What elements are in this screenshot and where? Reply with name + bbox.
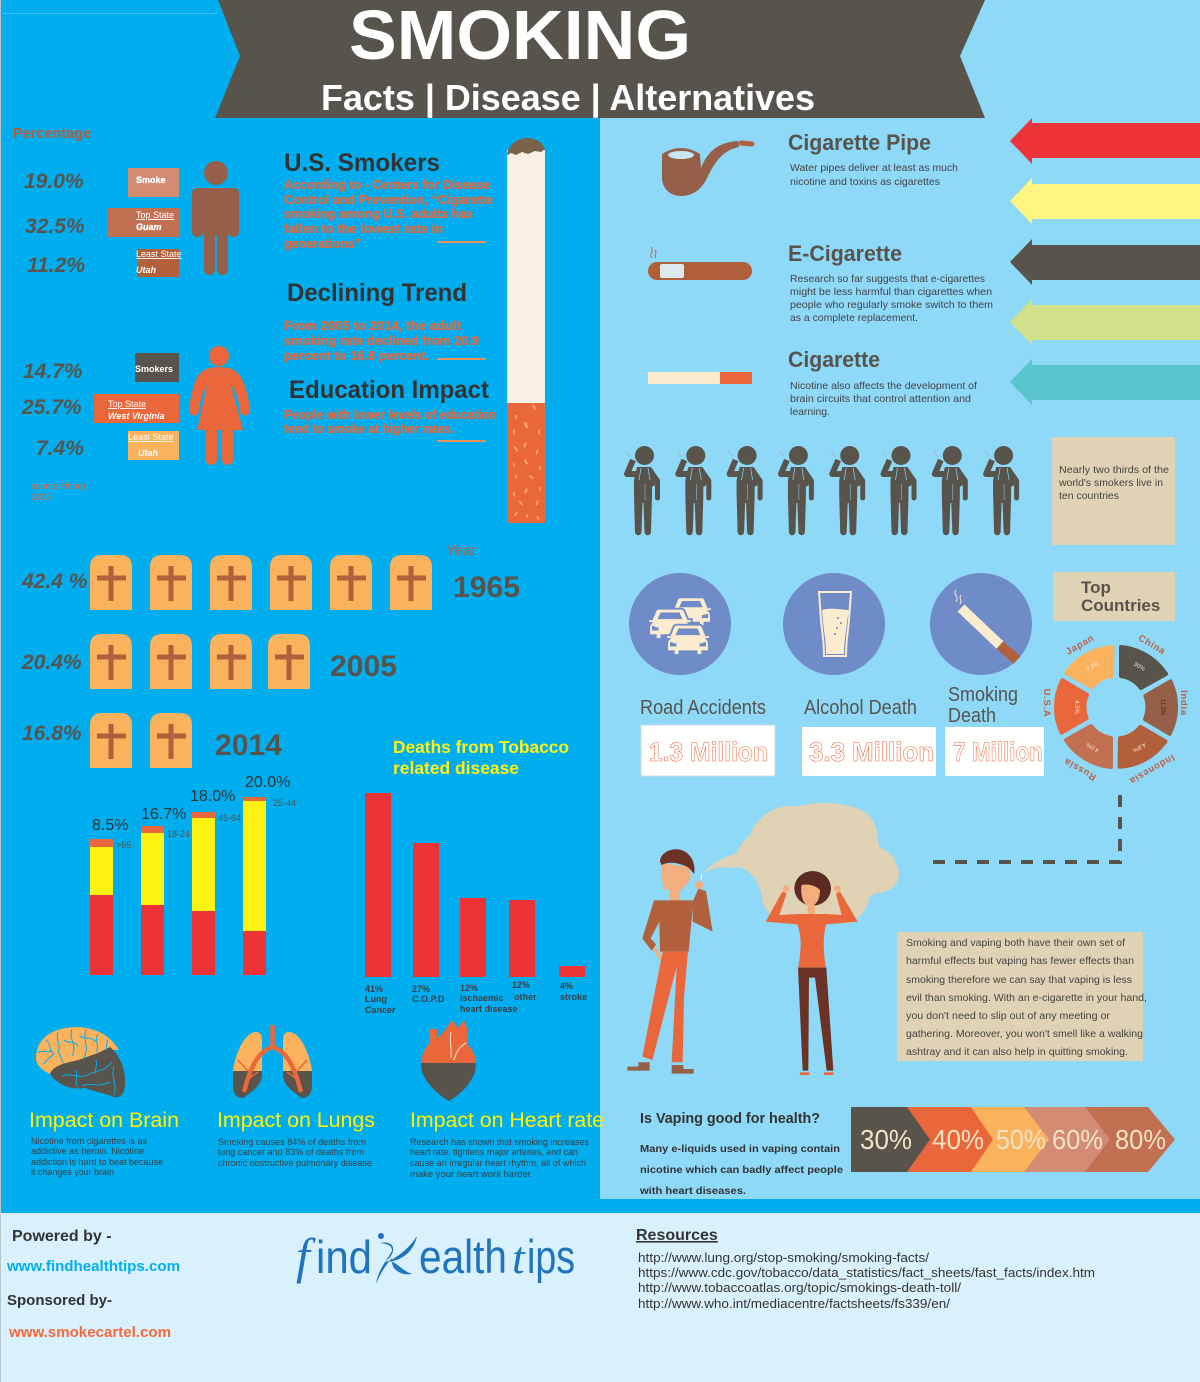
- chart title: related disease: [393, 758, 519, 778]
- value box: 7 Million: [953, 737, 1043, 767]
- text: heart: [410, 1137, 589, 1179]
- text: brain: Nicotine from cigarettes is as: [31, 1136, 147, 1146]
- icon: glass: [783, 573, 885, 675]
- panel: gender percentages: [13, 126, 250, 502]
- callout: smoking vs vaping: evil than smoking. With an e-cigarette in your hand,: [906, 992, 1147, 1004]
- stacked bar chart: age groups: >65: [116, 840, 131, 850]
- bar chart: deaths from tobacco: Ischaemic: [460, 993, 504, 1003]
- donut chart: top countries: 2.8%: [1086, 661, 1101, 673]
- text: lungs: chronic obstructive pulmonary disease: [218, 1158, 372, 1168]
- label: Smoking: [948, 684, 1018, 706]
- text: brain: it changes your brain: [31, 1167, 114, 1177]
- text block: CDC quote: smoking among U.S. adults has: [284, 207, 473, 221]
- panel: smoking death: [930, 573, 1044, 776]
- panel: alternatives: [648, 130, 993, 418]
- donut chart: top countries: 11.2%: [1159, 699, 1165, 716]
- chevron percentages: 80%: [1115, 1124, 1166, 1155]
- icon row: smokers: [626, 446, 1019, 535]
- row 2014: [22, 713, 282, 768]
- value box: 3.3 Million: [809, 737, 934, 767]
- text block: CDC quote: According to - Centers for Disease: [284, 178, 490, 192]
- heading: top countries: Top: [1081, 578, 1111, 597]
- male stats: Smoke: [136, 175, 166, 185]
- value box: [802, 727, 936, 776]
- male stats: [24, 168, 182, 277]
- text: heart: Research has shown that smoking increases: [410, 1137, 589, 1147]
- text: brain: [31, 1136, 163, 1177]
- heading: Is Vaping good for health?: [640, 1110, 820, 1127]
- chevron percentages: 40%: [932, 1124, 984, 1155]
- bar chart: deaths from tobacco: 12%: [512, 980, 530, 990]
- stacked bar chart: age groups: 8.5%: [92, 817, 128, 834]
- text block: CDC quote: fallen to the lowest rate in: [284, 222, 443, 236]
- logo: find health tips: f: [296, 1228, 316, 1284]
- text: e-cigarette: people who regularly smoke switch to them: [790, 299, 993, 311]
- icon: tall cigarette: [507, 138, 545, 523]
- chart title: [393, 737, 569, 778]
- stacked bar chart: age groups: 45-64: [218, 813, 241, 823]
- heading: Cigarette Pipe: Cigarette Pipe: [788, 130, 931, 155]
- text block: trend: From 2005 to 2014, the adult: [284, 319, 462, 333]
- year label: Year: [446, 542, 476, 559]
- male stats: 32.5%: [25, 215, 85, 238]
- footer: credits: [6, 1228, 180, 1341]
- heading: impact on lungs: Impact on Lungs: [217, 1108, 375, 1132]
- text: heart: make your heart work harder.: [410, 1169, 533, 1179]
- male stats: Top State: [136, 210, 174, 220]
- dashed connector: [933, 793, 1120, 862]
- bar chart: deaths from tobacco: 27%: [412, 984, 430, 994]
- text: heart: heart rate, tightens major arteries, and can: [410, 1147, 578, 1157]
- text: cigarette: Nicotine also affects the development of: [790, 380, 977, 392]
- callout: smoking vs vaping: Smoking and vaping both have their own set of: [906, 937, 1125, 949]
- text: heart: cause an irregular heart rhythm, all of which: [410, 1158, 586, 1168]
- female stats: 14.7%: [23, 360, 83, 383]
- stacked bar chart: age groups: 18-24: [167, 829, 190, 839]
- percentage heading: Percentage: [13, 126, 91, 142]
- panel: vaping question: [639, 1110, 843, 1197]
- icon: cars: [629, 573, 731, 675]
- title banner: [215, 0, 985, 119]
- row 2014: 16.8%: [22, 722, 82, 745]
- icon: woman: [189, 346, 250, 465]
- bar chart: deaths from tobacco: C.O.P.D: [412, 994, 445, 1004]
- stacked bar chart: age groups: [89, 774, 296, 975]
- label: [948, 684, 1018, 727]
- source note: source:kff.org: [31, 481, 86, 491]
- panel: impact on heart: [410, 1020, 604, 1179]
- icon: lungs: [233, 1025, 312, 1098]
- chevron percentages: [851, 1107, 1175, 1172]
- callout: smoking vs vaping: gathering. Moreover, you won't smell like a walking: [906, 1028, 1143, 1040]
- panel: gravestones by year: [21, 542, 520, 768]
- icon: pipe: [662, 141, 752, 196]
- heading: Declining Trend: Declining Trend: [287, 279, 467, 307]
- heading: top countries: [1053, 572, 1175, 621]
- text: e-cigarette: Research so far suggests that e-cigarettes: [790, 273, 985, 285]
- row 1965: 1965: [453, 571, 520, 604]
- icon: cigarette circle: [930, 573, 1032, 675]
- donut chart: top countries: Russia: [1062, 755, 1098, 783]
- stacked bar chart: age groups: 25-44: [273, 798, 296, 808]
- text block: Many e-liquids used in vaping contain: [640, 1143, 840, 1155]
- bar chart: deaths from tobacco: Lung: [365, 994, 387, 1004]
- bar chart: deaths from tobacco: 41%: [365, 984, 383, 994]
- heading: top countries: Countries: [1081, 596, 1160, 615]
- callout: smoking vs vaping: [897, 932, 1147, 1061]
- bar chart: deaths from tobacco: 12%: [460, 983, 478, 993]
- footer: resources: https://www.cdc.gov/tobacco/data_statistics/fact_sheets/fast_facts/index.htm: [638, 1265, 1095, 1280]
- logo: find health tips: t: [512, 1232, 526, 1283]
- female stats: 7.4%: [36, 437, 84, 460]
- illustration: man smoking: [627, 849, 713, 1074]
- logo: find health tips: ips: [527, 1230, 575, 1283]
- footer: credits: www.findhealthtips.com: [6, 1258, 180, 1275]
- stacked bar chart: age groups: 20.0%: [245, 774, 290, 791]
- panel: impact on brain: [29, 1027, 179, 1177]
- bar chart: deaths from tobacco: heart disease: [460, 1004, 518, 1014]
- footer: credits: Sponsored by-: [7, 1292, 112, 1309]
- chevron percentages: 50%: [996, 1124, 1046, 1155]
- footer: resources: Resources: [636, 1227, 718, 1244]
- male stats: Guam: [136, 222, 162, 232]
- bar chart: deaths from tobacco: 4%: [560, 981, 573, 991]
- callout: two thirds: [1052, 437, 1175, 545]
- text block: trend: percent to 16.8 percent.: [284, 349, 429, 363]
- stacked bar chart: age groups: 16.7%: [141, 806, 186, 823]
- callout: smoking vs vaping: ashtray and it can also help in quitting smoking.: [906, 1046, 1128, 1058]
- text: cigarette: learning.: [790, 406, 830, 418]
- footer: resources: http://www.who.int/mediacentre/factsheets/fs339/en/: [638, 1296, 950, 1311]
- donut chart: top countries: 4.5%: [1073, 700, 1079, 714]
- panel: U.S. smokers text: [284, 149, 496, 442]
- chevron percentages: 30%: [860, 1124, 912, 1155]
- male stats: 19.0%: [24, 170, 84, 193]
- footer: resources: http://www.lung.org/stop-smoking/smoking-facts/: [638, 1250, 929, 1265]
- heading: U.S. Smokers: U.S. Smokers: [284, 149, 440, 177]
- panel: alcohol death: [783, 573, 936, 776]
- donut chart: top countries: 30%: [1132, 662, 1146, 673]
- heading: impact on heart rate: Impact on Heart rate: [410, 1108, 604, 1132]
- heading: E-Cigarette: E-Cigarette: [788, 241, 902, 266]
- text block: trend: smoking rate declined from 20.9: [284, 334, 479, 348]
- icon: e-cigarette: [648, 247, 752, 280]
- male stats: Least State: [136, 249, 182, 259]
- bar chart: deaths from tobacco: other: [514, 992, 537, 1002]
- icon: cigarette: [648, 372, 752, 384]
- logo: find health tips: ealth: [419, 1230, 507, 1283]
- footer: resources: [636, 1227, 1095, 1311]
- text: pipe: [790, 162, 958, 188]
- text: e-cigarette: might be less harmful than cigarettes when: [790, 286, 992, 298]
- icon: heart: [421, 1020, 476, 1101]
- illustration: woman: [766, 871, 858, 1075]
- heading: Cigarette: Cigarette: [788, 347, 880, 372]
- donut chart: top countries: China: [1136, 633, 1167, 657]
- text block: education: People with lower levels of education: [284, 408, 496, 422]
- text: lungs: [218, 1137, 372, 1168]
- illustration: smoke cloud: [703, 803, 899, 923]
- text block: education: tend to smoke at higher rates.: [284, 422, 454, 436]
- panel: road accidents: [629, 573, 775, 776]
- text: lungs: Smoking causes 84% of deaths from: [218, 1137, 366, 1147]
- donut chart: top countries: 4.0%: [1085, 740, 1100, 753]
- logo: find health tips: [296, 1228, 575, 1284]
- source note: [30, 481, 86, 502]
- row 1965: [21, 555, 520, 610]
- text: e-cigarette: as a complete replacement.: [790, 312, 918, 324]
- donut chart: top countries: U.S.A: [1041, 689, 1052, 717]
- female stats: Top State: [108, 399, 146, 409]
- subtitle: Facts | Disease | Alternatives: [321, 77, 815, 119]
- chevron percentages: 60%: [1052, 1124, 1103, 1155]
- panel: impact on lungs: [217, 1025, 375, 1168]
- text block: CDC quote: generations”: [284, 237, 361, 251]
- stacked bar chart: age groups: 18.0%: [190, 788, 235, 805]
- chart title: Deaths from Tobacco: [393, 737, 569, 757]
- row 2005: 20.4%: [21, 651, 82, 674]
- callout: two thirds: Nearly two thirds of the: [1059, 464, 1169, 476]
- female stats: West Virginia: [108, 411, 165, 421]
- footer: credits: www.smokecartel.com: [8, 1324, 171, 1341]
- text: lungs: lung cancer and 83% of deaths from: [218, 1147, 364, 1157]
- label: Death: [948, 705, 996, 727]
- icon: brain: [36, 1027, 125, 1097]
- source note: 2015: [30, 492, 52, 502]
- text: pipe: Water pipes deliver at least as much: [790, 162, 958, 174]
- callout: smoking vs vaping: harmful effects but vaping has fewer effects than: [906, 955, 1134, 967]
- heading: impact on brain: Impact on Brain: [29, 1108, 179, 1132]
- callout: smoking vs vaping: you don't need to slip out of any meeting or: [906, 1010, 1110, 1022]
- text block: CDC quote: [284, 178, 493, 251]
- donut chart: top countries: India: [1178, 690, 1189, 716]
- male stats: 11.2%: [27, 254, 85, 277]
- text block: nicotine which can badly affect people: [640, 1164, 843, 1176]
- row 1965: 42.4 %: [21, 570, 88, 593]
- female stats: [21, 353, 179, 460]
- text block: education: [284, 408, 496, 436]
- value box: [945, 727, 1044, 776]
- logo: find health tips: ind: [316, 1231, 372, 1283]
- label: Alcohol Death: [804, 697, 917, 719]
- text block: trend: [284, 319, 479, 363]
- male stats: Utah: [136, 265, 157, 275]
- footer: resources: http://www.tobaccoatlas.org/topic/smokings-death-toll/: [638, 1280, 961, 1295]
- female stats: Smokers: [135, 364, 173, 374]
- bar chart: deaths from tobacco: [365, 737, 587, 1015]
- text block: with heart diseases.: [639, 1185, 746, 1197]
- donut chart: top countries: Indonesia: [1127, 751, 1176, 786]
- heading: Education Impact: Education Impact: [289, 376, 490, 404]
- female stats: 25.7%: [21, 396, 82, 419]
- text: pipe: nicotine and toxins as cigarettes: [790, 176, 940, 188]
- bar chart: deaths from tobacco: Cancer: [365, 1005, 396, 1015]
- donut chart: top countries: [1039, 633, 1193, 786]
- bar chart: deaths from tobacco: stroke: [560, 992, 587, 1002]
- donut chart: top countries: 4.8%: [1131, 741, 1146, 753]
- value box: [641, 725, 775, 776]
- text block: CDC quote: Control and Prevention, “Cigarette: [284, 193, 493, 207]
- row 2014: 2014: [215, 729, 282, 762]
- donut chart: top countries: Japan: [1064, 633, 1096, 658]
- text: brain: addiction is hard to beat because: [31, 1157, 163, 1167]
- callout: two thirds: world's smokers live in: [1058, 477, 1163, 489]
- row 2005: 2005: [330, 650, 397, 683]
- value box: 1.3 Million: [649, 737, 768, 767]
- text block: [639, 1143, 843, 1197]
- female stats: Utah: [138, 448, 159, 458]
- arrows: [1010, 118, 1200, 405]
- callout: smoking vs vaping: smoking therefore we can say that vaping is less: [906, 974, 1132, 986]
- text: e-cigarette: [790, 273, 993, 324]
- row 2005: [21, 634, 397, 689]
- footer: credits: Powered by -: [12, 1228, 112, 1245]
- callout: two thirds: ten countries: [1059, 490, 1119, 502]
- text: cigarette: brain circuits that control attention and: [790, 393, 971, 405]
- text: brain: addictive as heroin. Nicotine: [31, 1146, 144, 1156]
- label: Road Accidents: [640, 697, 766, 719]
- text: cigarette: [790, 380, 977, 418]
- icon: man: [192, 161, 239, 275]
- female stats: Least State: [128, 432, 174, 442]
